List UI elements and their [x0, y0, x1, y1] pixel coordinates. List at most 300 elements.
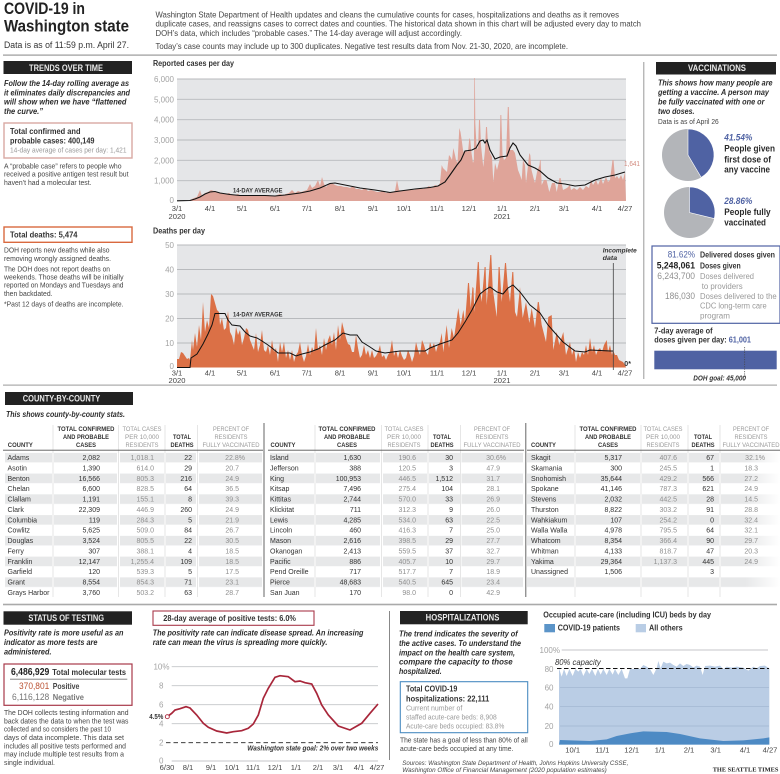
county table: right: Stevens: [531, 496, 557, 504]
callout: doses: Doses delivered to the: [700, 292, 777, 301]
county table: right: 107: [610, 517, 622, 524]
testing note: includes all positive tests performed and: [4, 741, 126, 750]
county table: left: 39.3: [225, 496, 239, 504]
county table: right: PER 10,000: [646, 434, 680, 441]
y axis labels: cases: 3,000: [154, 136, 175, 145]
callout: doses: 5,248,061: [657, 260, 696, 271]
x axis labels: deaths: 8/1: [335, 369, 345, 378]
county table: left: 109: [180, 559, 192, 566]
county table: right: COUNTY: [531, 442, 557, 449]
chart title: deaths: Deaths per day: [153, 225, 205, 235]
county table: left: 28.7: [225, 590, 239, 597]
14-day average line: cases: [177, 140, 625, 201]
county table: right: 566: [702, 476, 714, 483]
x axis labels: cases: 6/1: [270, 204, 280, 213]
vaccination intro text: [657, 78, 773, 116]
y axis labels: beds: 80: [545, 665, 554, 674]
county table: left: 63: [184, 590, 192, 597]
hospitalization intro text: the active cases. To understand the: [399, 638, 521, 648]
testing note: back dates the data to when the test was: [4, 716, 129, 725]
testing note: [4, 708, 129, 767]
panel: hospitalizations: [399, 611, 528, 753]
callout: doses: Doses delivered: [700, 272, 754, 281]
county table: middle: 47.9: [486, 465, 500, 472]
pie: first dose: [662, 129, 714, 181]
x axis labels: beds: 4/27: [763, 746, 777, 755]
callout: total hospitalizations: Acute-care beds occupied: 83.8%: [406, 721, 505, 730]
x axis labels: cases: 8/1: [335, 204, 345, 213]
county table: right: 47: [706, 548, 714, 555]
county table: left: 12,147: [79, 559, 100, 566]
panel: county-by-county: [3, 392, 780, 598]
hospitalization intro text: [399, 629, 521, 676]
county table: left: Garfield: [8, 569, 32, 576]
county table: middle: [270, 426, 521, 597]
county table: middle: 7,496: [343, 486, 361, 493]
county table: middle: 9: [449, 507, 453, 514]
county table: right: 32.4: [744, 517, 758, 524]
x axis labels: beds: 2/1: [684, 746, 694, 755]
county table: right: 32.1: [744, 528, 758, 535]
county table: left: 216: [180, 476, 192, 483]
county table: left: 84: [184, 528, 192, 535]
x axis labels: positivity: 10/1: [225, 763, 239, 772]
label: 14-day average: 14-DAY AVERAGE: [233, 188, 283, 194]
county table: left: 388.1: [136, 548, 154, 555]
panel: trends over time text: [3, 61, 132, 309]
county table: middle: 398.5: [398, 538, 416, 545]
label: fully vaccinated: [723, 196, 771, 229]
county table: middle: Kitsap: [270, 486, 290, 493]
county table: middle: PERCENT OF: [474, 426, 510, 433]
intro text: Washington State Department of Health updates and cleans the cumulative counts for cases, hospitalizations and deaths as it removes: [156, 9, 619, 19]
county table: middle: 18.9: [486, 569, 500, 576]
county table: right: Whitman: [531, 548, 559, 555]
county table: left: Grays Harbor: [8, 590, 50, 597]
testing note: days of data incomplete. This data set: [4, 733, 125, 742]
7-day average label: [654, 325, 751, 344]
county table: middle: TOTAL CASES: [384, 426, 424, 433]
y axis labels: cases: 0: [170, 196, 175, 205]
county table: middle: Mason: [270, 538, 291, 545]
county table: left: 18.5: [225, 548, 239, 555]
x axis labels: deaths: 3/1: [172, 369, 182, 378]
county table: middle: 7: [449, 528, 453, 535]
panel: status of testing: [4, 611, 132, 767]
county table: middle: 388: [349, 465, 361, 472]
callout: molecular tests: [4, 664, 132, 705]
county table: right: 8,354: [604, 538, 622, 545]
positivity intro text: [153, 628, 364, 647]
county table: left: 2,082: [82, 455, 100, 462]
bar: doses vs goal: [654, 347, 777, 378]
county table: right: 24.9: [744, 486, 758, 493]
callout: molecular tests: 6,116,128: [12, 692, 49, 703]
county table: left: FULLY VACCINATED: [202, 442, 260, 449]
x axis labels: beds: 12/1: [624, 746, 639, 755]
legend: All others: [649, 623, 683, 633]
county table: middle: Klickitat: [270, 507, 294, 514]
county table: middle: 886: [349, 559, 361, 566]
county table: left: 805.3: [136, 476, 154, 483]
x axis labels: beds: 11/1: [595, 746, 609, 755]
county table: right: 24.9: [744, 559, 758, 566]
x axis labels: deaths: 12/1: [462, 369, 476, 378]
x axis labels: cases: 10/1: [397, 204, 411, 213]
y axis labels: cases: 6,000: [154, 75, 175, 84]
county table: left: 446.9: [136, 507, 154, 514]
county table: left: 1,255.4: [131, 559, 154, 566]
county table: left: 284.3: [136, 517, 154, 524]
county table: right: 1: [710, 465, 714, 472]
y axis labels: cases: [154, 75, 175, 205]
note: deaths: [3, 246, 124, 309]
county table: left: 1,018.1: [131, 455, 154, 462]
county table: middle: 534.0: [398, 517, 416, 524]
intro italic text: it eliminates daily discrepancies and: [4, 87, 131, 97]
7-day average label: 7-day average of: [654, 325, 713, 335]
callout: total deaths: [4, 227, 132, 242]
county table: middle: COUNTY: [270, 442, 296, 449]
x axis labels: positivity: 8/1: [183, 763, 193, 772]
label: 80% capacity: 80% capacity: [555, 658, 602, 667]
county table: left: CASES: [76, 442, 97, 449]
note: probable case: [4, 161, 129, 187]
county table: middle: RESIDENTS: [388, 442, 421, 449]
callout: total hospitalizations: Current number of: [406, 704, 463, 713]
callout: 28-day average: [153, 611, 314, 625]
county table: right: RESIDENTS: [646, 442, 680, 449]
county table: left: 23.1: [225, 580, 239, 587]
county table: left: PER 10,000: [125, 434, 159, 441]
county table: middle: 2,616: [343, 538, 361, 545]
county table: right: 795.5: [659, 528, 677, 535]
county table: left: 4: [188, 548, 192, 555]
county table: right: [531, 426, 780, 576]
county table: left: 1,390: [82, 465, 100, 472]
y axis labels: cases: 4,000: [154, 116, 175, 125]
county table: middle: 446.5: [398, 476, 416, 483]
label: first dose: any vaccine: [724, 165, 770, 176]
county table: middle: 98.0: [402, 590, 416, 597]
county table: left: Grant: [8, 580, 25, 587]
label: state goal: Washington state goal: 2% over two weeks: [247, 743, 378, 752]
county table: middle: 32.7: [486, 548, 500, 555]
county table: middle: 2,744: [343, 496, 361, 504]
county table: left: Clark: [8, 507, 24, 514]
county table: middle: 30: [445, 455, 453, 462]
county table: right: 64: [706, 528, 714, 535]
county table: left: 539.3: [136, 569, 154, 576]
county table: left: 71: [184, 580, 192, 587]
county table: left: 3,524: [82, 538, 100, 545]
y axis labels: positivity: 2: [159, 739, 164, 748]
credit: The Seattle Times: THE SEATTLE TIMES: [713, 767, 779, 774]
county table: middle: 25.0: [486, 528, 500, 535]
x axis labels: cases: 2/1: [530, 204, 540, 213]
county table: middle: Pacific: [270, 559, 291, 566]
county table: right: 621: [702, 486, 714, 493]
county table: right: DEATHS: [692, 442, 715, 449]
county table: middle: 275.4: [398, 486, 416, 493]
county table: right: 366.4: [659, 538, 677, 545]
county table: left: 17.5: [225, 569, 239, 576]
county table: middle: 30.6%: [486, 455, 506, 462]
callout: doses: 81.62%: [668, 249, 695, 259]
county table: left: Columbia: [8, 517, 37, 524]
county table: middle: 540.5: [398, 580, 416, 587]
county table: middle: King: [270, 476, 284, 483]
heading: county-by-county: COUNTY-BY-COUNTY: [23, 394, 100, 404]
y axis labels: positivity: 4: [159, 720, 164, 729]
x axis labels: deaths: 4/1: [592, 369, 602, 378]
county table: right: 787.3: [659, 486, 677, 493]
annotation: incomplete data: [603, 247, 637, 370]
positivity curve: [167, 676, 378, 733]
x axis labels: cases: 4/1: [592, 204, 602, 213]
county table: middle: 559.5: [398, 548, 416, 555]
callout: total cases: probable cases: 400,149: [10, 136, 95, 146]
county table: right: 818.7: [659, 548, 677, 555]
note: deaths: *Past 12 days of deaths are incomplete.: [4, 300, 124, 309]
annotation: incomplete data: Incomplete: [603, 247, 637, 254]
title: Washington state: [4, 16, 129, 36]
county table: middle: Kittitas: [270, 496, 292, 504]
county table: right: Skagit: [531, 455, 551, 462]
county table: left: 155.1: [136, 496, 154, 504]
county table: left: 16,566: [79, 476, 100, 483]
testing note: collected and so considers the past 10: [4, 725, 111, 734]
callout: total cases: Total confirmed and: [10, 126, 80, 136]
county intro: This shows county-by-county stats.: [6, 409, 125, 419]
county table: right: 32.1%: [745, 455, 765, 462]
sources: Sources: Washington State Department of Health, Johns Hopkins University CSSE,: [402, 760, 628, 767]
county table: middle: 37: [445, 548, 453, 555]
county table: middle: CASES: [337, 442, 358, 449]
daily death bars: [177, 255, 626, 368]
county table: right: 407.6: [659, 455, 677, 462]
area: COVID-19 patients: [559, 731, 769, 745]
county table: middle: 1,630: [343, 455, 361, 462]
county table: right: TOTAL CASES: [644, 426, 683, 433]
y axis labels: positivity: 10%: [153, 663, 170, 672]
sources: [402, 760, 628, 774]
date line: Data is as of 11:59 p.m. April 27.: [4, 40, 129, 50]
county table: right: 4,978: [604, 528, 622, 535]
county table: left: Benton: [8, 476, 30, 483]
county table: right: PERCENT OF: [733, 426, 769, 433]
callout: doses: [652, 246, 780, 323]
county table: right: Wahkiakum: [531, 517, 567, 524]
x axis labels: positivity: 4/27: [370, 763, 384, 772]
county table: middle: 460: [349, 528, 361, 535]
label: start value: 4.5%: [149, 714, 164, 721]
county table: middle: 33: [445, 496, 453, 504]
county table: left: 64: [184, 486, 192, 493]
x axis labels: deaths: 11/1: [430, 369, 444, 378]
x axis labels: deaths: 10/1: [397, 369, 411, 378]
testing note: The DOH collects testing information and: [4, 708, 128, 717]
county table: middle: RESIDENTS: [476, 434, 509, 441]
x axis labels: cases: 12/1: [462, 204, 476, 213]
county table: middle: DEATHS: [430, 442, 454, 449]
label: 14-day average deaths: 14-DAY AVERAGE: [233, 312, 283, 319]
x axis labels: deaths: 1/1: [497, 369, 507, 378]
county table: left: Clallam: [8, 496, 31, 504]
annotation: incomplete data: data: [603, 255, 617, 262]
x axis labels: cases: 1/1: [497, 204, 507, 213]
county table: middle: Okanogan: [270, 548, 302, 555]
county table: left: 29: [184, 465, 192, 472]
county table: left: 805.5: [136, 538, 154, 545]
y axis labels: cases: 1,000: [154, 177, 175, 186]
intro italic text: Follow the 14-day rolling average as: [4, 78, 129, 88]
county table: right: 91: [706, 507, 714, 514]
county table: left: 30.5: [225, 538, 239, 545]
x axis labels: positivity: 4/1: [354, 763, 364, 772]
county table: left: RESIDENTS: [126, 442, 159, 449]
x axis labels: cases: 2020: [169, 212, 185, 221]
callout: doses: 186,030: [665, 291, 695, 301]
county table: right: 90: [706, 538, 714, 545]
county table: left: 5,625: [82, 528, 100, 535]
14-day average line: deaths: [177, 285, 613, 368]
county table: middle: San Juan: [270, 590, 300, 597]
hospital goal note: acute-care beds occupied at any time.: [400, 744, 513, 753]
county table: middle: 717: [349, 569, 361, 576]
callout: total cases: 14-day average of cases per day: 1,421: [10, 146, 126, 154]
note: probable case: received a positive antigen test result but: [4, 170, 129, 179]
county table: left: 26.7: [225, 528, 239, 535]
county table: left: Ferry: [8, 548, 24, 555]
note: deaths: reported on Mondays and Tuesdays and: [4, 281, 124, 290]
label: DOH goal: DOH goal: 45,000: [693, 376, 746, 382]
x axis labels: positivity: 12/1: [268, 763, 282, 772]
y axis labels: beds: 100%: [540, 646, 560, 655]
positivity intro text: The positivity rate can indicate disease spread. An increasing: [153, 628, 364, 638]
county table: middle: 23.4: [486, 580, 500, 587]
county table: right: TOTAL: [694, 434, 712, 441]
callout: total hospitalizations: staffed acute-care beds: 8,908: [406, 712, 497, 721]
label: first dose: [723, 133, 775, 176]
callout: doses: CDC long-term care: [700, 302, 767, 311]
callout: molecular tests: Negative: [53, 692, 84, 702]
county table: middle: Pend Oreille: [270, 569, 309, 576]
county table: left: 22: [184, 538, 192, 545]
county table: right: 35,644: [601, 476, 622, 483]
county table: middle: 190.6: [398, 455, 416, 462]
x axis labels: cases: 7/1: [302, 204, 312, 213]
callout: molecular tests: 370,801: [19, 681, 49, 692]
y axis labels: positivity: [153, 663, 170, 766]
x axis labels: cases: 4/1: [205, 204, 215, 213]
county table: left: 22,309: [79, 507, 100, 514]
county table: left: 119: [89, 517, 100, 524]
vaccination intro text: be fully vaccinated with one or: [658, 96, 765, 106]
county table: middle: 104: [441, 486, 453, 493]
note: probable case: haven’t had a molecular test.: [4, 178, 92, 187]
county table: middle: Jefferson: [270, 465, 299, 472]
county table: left: 8,554: [82, 580, 100, 587]
county table: left: 5: [188, 517, 192, 524]
y axis labels: deaths: 40: [165, 266, 175, 274]
daily case bars: [188, 78, 626, 201]
county table: middle: 22.5: [486, 517, 500, 524]
county table: right: 245.5: [659, 465, 677, 472]
county table: left: DEATHS: [170, 442, 194, 449]
county table: left: 1,191: [82, 496, 100, 504]
callout: doses: Doses given: [700, 261, 741, 270]
county table: left: 36.5: [225, 486, 239, 493]
county table: middle: 312.3: [398, 507, 416, 514]
pie: fully vaccinated: [664, 187, 715, 238]
y axis labels: positivity: 6: [159, 701, 164, 710]
county table: middle: 42.9: [486, 590, 500, 597]
county table: middle: 517.7: [398, 569, 416, 576]
label: latest cases: 1,641: [624, 161, 640, 168]
x axis labels: cases: 5/1: [237, 204, 247, 213]
hospitalization intro text: hospitalized.: [399, 666, 442, 676]
callout: doses: 6,243,700: [657, 271, 695, 281]
sources: Washington Office of Financial Management (2020 population estimates): [402, 767, 607, 774]
x axis labels: deaths: 4/1: [205, 369, 215, 378]
intro text: Today’s case counts may include up to 300 duplicates. Negative test results data from Nov. 21-30, 2020, are incomplete.: [156, 41, 568, 51]
county table: right: 14.5: [744, 496, 758, 504]
x axis labels: beds: 1/1: [655, 746, 665, 755]
testing intro text: indicator as more tests are: [4, 637, 98, 647]
county table: right: 2,032: [604, 496, 622, 504]
county table: right: AND PROBABLE: [585, 434, 632, 441]
county table: left: AND PROBABLE: [63, 434, 110, 441]
callout: total hospitalizations: Total COVID-19: [406, 684, 457, 694]
county table: left: 22: [184, 455, 192, 462]
county table: middle: 48,683: [340, 580, 361, 587]
county table: right: Unassigned: [531, 569, 568, 576]
county table: left: 307: [88, 548, 100, 555]
county table: left: [8, 426, 260, 597]
x axis labels: cases: 3/1: [559, 204, 569, 213]
note: deaths: The DOH does not report deaths on: [4, 264, 110, 273]
x axis labels: cases: 11/1: [430, 204, 444, 213]
county table: left: RESIDENTS: [214, 434, 248, 441]
callout: doses: program: [700, 311, 730, 320]
county table: left: Cowlitz: [8, 528, 31, 535]
title: [4, 0, 129, 36]
county table: right: 5,317: [604, 455, 622, 462]
heading: vaccinations: VACCINATIONS: [688, 63, 746, 73]
y axis labels: beds: [540, 646, 560, 749]
x axis labels: deaths: [169, 369, 632, 385]
county table: left: 509.0: [136, 528, 154, 535]
county table: middle: TOTAL CONFIRMED: [318, 426, 376, 433]
y axis labels: beds: 20: [545, 722, 554, 731]
intro text: duplicate cases, and reassigns cases to correct dates and counties. The historical data shown in this chart will be adjusted every day to match: [156, 19, 641, 29]
x axis labels: positivity: 1/1: [291, 763, 301, 772]
header: [4, 0, 641, 51]
label: fully vaccinated: 28.86%: [723, 196, 752, 206]
data date: Data is as of April 26: [658, 117, 719, 126]
note: probable case: A “probable case” refers to people who: [4, 161, 122, 170]
testing intro text: Positivity rate is more useful as an: [4, 628, 124, 638]
label: fully vaccinated: vaccinated: [724, 218, 766, 229]
county table: right: CASES: [598, 442, 619, 449]
start marker: [165, 715, 169, 719]
county table: left: 854.3: [136, 580, 154, 587]
chart: positivity line: [149, 663, 384, 772]
county table: right: 1,137.3: [654, 559, 677, 566]
county table: middle: 29.7: [486, 559, 500, 566]
x axis labels: beds: 4/1: [740, 746, 750, 755]
